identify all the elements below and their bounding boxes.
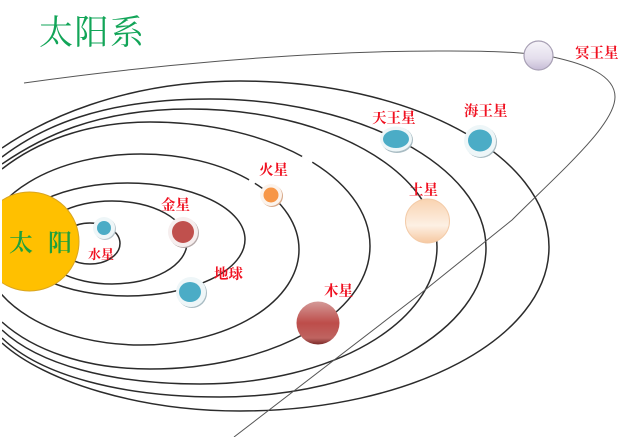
planet: Mars: [260, 184, 283, 207]
label: Mercury: 水星: [88, 247, 114, 262]
label: Earth: 地球: [214, 265, 243, 283]
sun label: [10, 230, 71, 254]
planet: Neptune: [464, 125, 497, 158]
planet: Uranus: [380, 126, 413, 153]
orbits: [0, 81, 549, 411]
label: Mars: 火星: [259, 162, 288, 179]
label: Neptune: 海王星: [464, 103, 508, 120]
orbit: Venus: [66, 200, 188, 285]
planet: Venus: [168, 217, 199, 248]
sun label: 阳: [48, 230, 72, 257]
label: Saturn: 土星: [409, 181, 438, 199]
orbit: Mercury: [75, 222, 121, 265]
planet: Earth: [176, 277, 207, 308]
orbit: Mars: [0, 154, 299, 345]
planet: Jupiter: [296, 302, 340, 344]
sun: [0, 192, 79, 291]
planet: Mercury: [93, 217, 116, 240]
label: Jupiter: 木星: [324, 282, 353, 300]
label: Pluto: 冥王星: [575, 45, 619, 62]
orbit: Saturn: [2, 109, 437, 384]
orbit gap: Mars: [249, 180, 255, 183]
orbit: Earth: [50, 182, 246, 297]
orbit: Uranus: [2, 99, 486, 397]
orbit: Jupiter: [2, 122, 370, 369]
label: Venus: 金星: [161, 196, 190, 214]
label: Uranus: 天王星: [372, 110, 416, 127]
planet: Saturn: [406, 199, 450, 243]
sun label: 太: [9, 230, 33, 257]
orbit gap: Jupiter: [303, 155, 313, 161]
planet: Pluto: [524, 41, 553, 70]
title: 太阳系: [39, 14, 146, 52]
orbit: Neptune: [2, 81, 549, 411]
